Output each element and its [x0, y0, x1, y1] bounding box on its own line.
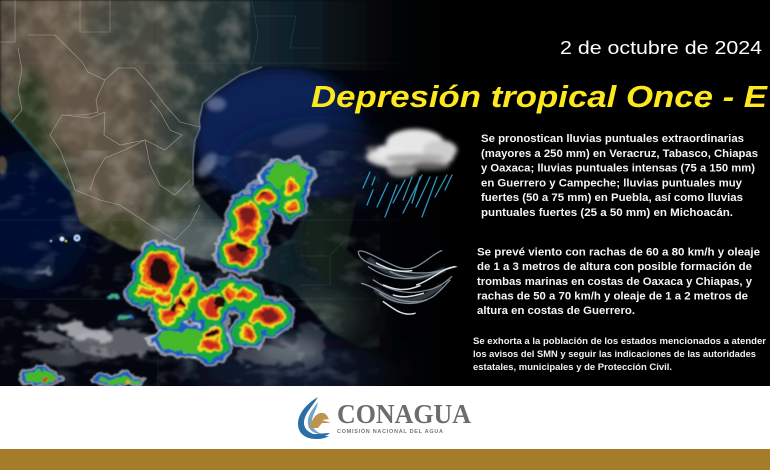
civil protection advisory [473, 336, 767, 372]
civil protection advisory: los avisos del SMN y seguir las indicaciones de las autoridades [473, 349, 756, 359]
coast glow [193, 67, 262, 185]
baja tip [0, 156, 7, 174]
fade to black on the right [320, 0, 460, 386]
title: Depresión tropical Once - E [311, 79, 768, 114]
rain forecast paragraph: (mayores a 250 mm) en Veracruz, Tabasco, Chiapas [481, 148, 758, 160]
pale cloud texture [0, 150, 380, 386]
cloud shield over southern Mexico [143, 218, 320, 364]
CONAGUA logo [298, 397, 471, 439]
rain forecast paragraph: fuertes (50 a 75 mm) en Puebla, así como lluvias [481, 192, 743, 204]
high clouds over pacific [25, 268, 324, 367]
civil protection advisory: Se exhorta a la población de los estados mencionados a atender [473, 336, 767, 346]
civil protection advisory: estatales, municipales y de Protección Civil. [473, 362, 672, 372]
deep red and black cores [230, 207, 278, 321]
islands [50, 234, 80, 242]
small red cells [42, 377, 131, 386]
icon: rain cloud [363, 129, 457, 217]
rain forecast paragraph: Se pronostican lluvias puntuales extraordinarias [481, 133, 744, 145]
convective storm clusters [16, 157, 318, 388]
icon: conagua emblem [298, 397, 331, 439]
rain forecast paragraph: puntuales fuertes (25 a 50 mm) en Michoacán. [481, 207, 733, 219]
wind forecast paragraph: Se prevé viento con rachas de 60 a 80 km/h y oleaje [477, 246, 760, 258]
wordmark: CONAGUA [337, 399, 471, 429]
rain forecast paragraph: y Oaxaca; lluvias puntuales intensas (75 a 150 mm) [481, 162, 755, 174]
dim distant borders [252, 0, 345, 285]
graticule lines [0, 0, 400, 386]
gulf of mexico [195, 67, 365, 203]
wind forecast paragraph: de 1 a 3 metros de altura con posible formación de [477, 261, 752, 273]
icon: wind [358, 251, 457, 314]
pacific ocean [0, 150, 90, 290]
clouds in gulf [193, 97, 331, 180]
rain forecast paragraph: en Guerrero y Campeche; lluvias puntuales muy [481, 178, 743, 190]
date: 2 de octubre de 2024 [560, 38, 762, 58]
footer gold band [0, 449, 770, 470]
wind forecast paragraph: rachas de 50 a 70 km/h y oleaje de 1 a 2 metros de [477, 290, 748, 302]
state and country borders [0, 0, 200, 240]
agency name: COMISIÓN NACIONAL DEL AGUA [337, 427, 443, 435]
wind forecast paragraph: altura en costas de Guerrero. [477, 305, 635, 317]
landmass of Mexico and neighbours [0, 0, 378, 344]
footer white band [0, 386, 770, 449]
rain forecast paragraph [481, 133, 758, 219]
wind forecast paragraph [477, 246, 760, 317]
wind forecast paragraph: trombas marinas en costas de Oaxaca y Chiapas, y [477, 276, 753, 288]
